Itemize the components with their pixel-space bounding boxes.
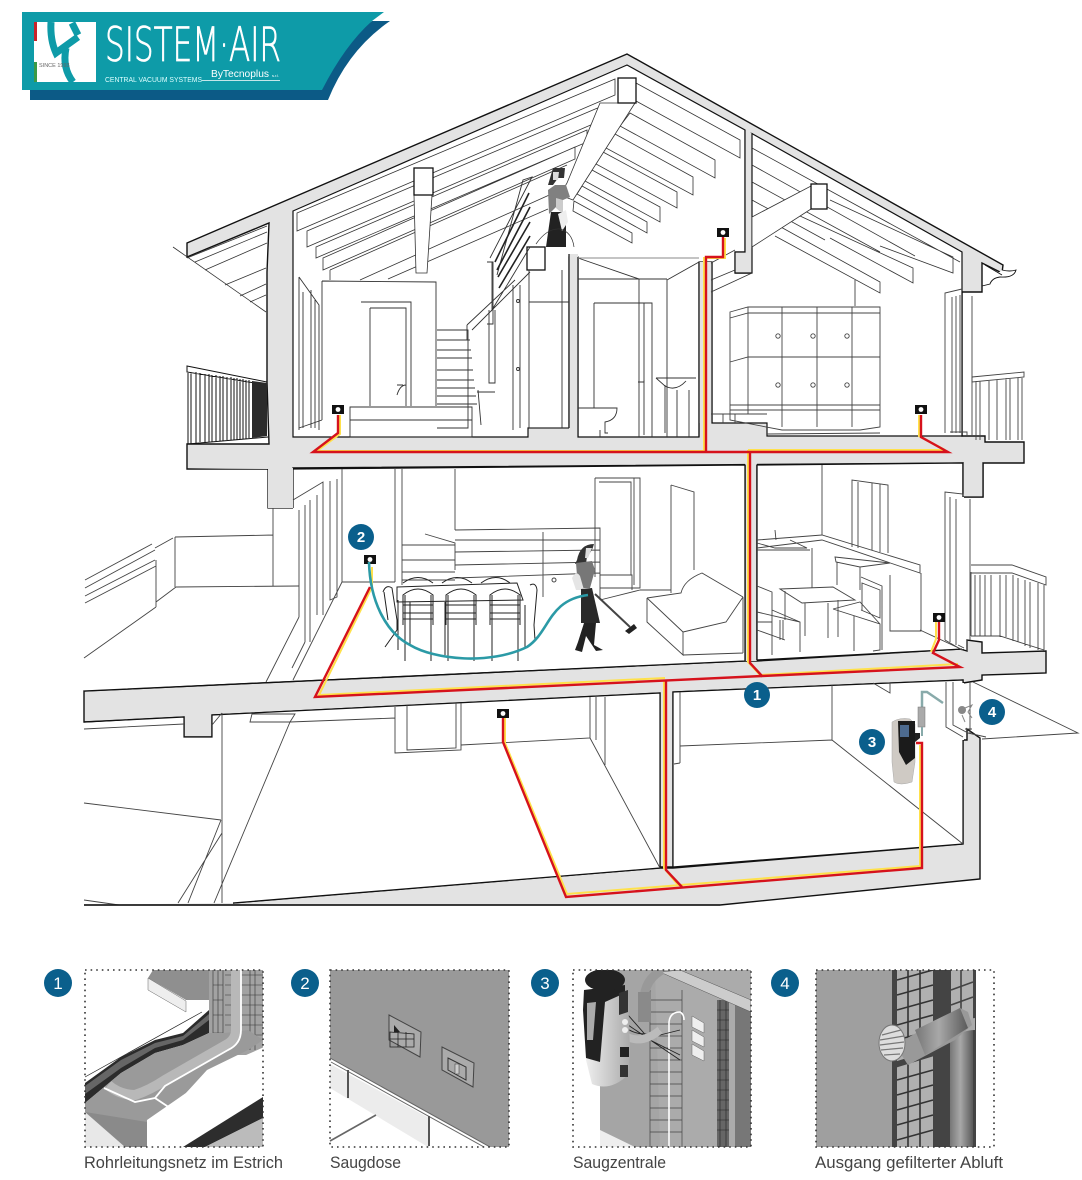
flexible hose: [369, 562, 588, 659]
caption: Rohrleitungsnetz im Estrich: [84, 1154, 283, 1172]
badge: 2: [300, 974, 310, 993]
panel 3: central unit: [531, 969, 751, 1172]
terrace lower left: [84, 508, 299, 658]
badge: 4: [780, 974, 790, 993]
room: basement right: [673, 680, 963, 867]
caption: Ausgang gefilterter Abluft: [815, 1154, 1003, 1172]
badge: [771, 969, 799, 997]
stair railing: [495, 193, 530, 288]
badge 2: 2: [357, 529, 365, 546]
panel 1: pipe network: [44, 969, 283, 1172]
logo: Sistem-Air: [22, 12, 390, 100]
roof beam boxes: [414, 78, 827, 270]
woman vacuuming: [572, 544, 637, 652]
dotted frame: [85, 970, 263, 1147]
vent outlet small: [958, 705, 972, 722]
vacuum exhaust pipe: [918, 692, 943, 736]
attic rafters and beams: [297, 79, 960, 293]
bathroom interior: [578, 258, 699, 437]
logo: Sistem-Air: SISTEM·AIR: [105, 18, 281, 73]
illustration: [583, 969, 751, 1147]
kitchen interior: [757, 465, 963, 655]
badge: [44, 969, 72, 997]
caption: Saugzentrale: [573, 1154, 666, 1172]
basement interior and terrace: [84, 682, 1078, 905]
dining table with chairs: [383, 578, 537, 661]
illustration: [330, 970, 509, 1147]
vacuum sockets: [332, 228, 945, 718]
panel 2: socket: [291, 969, 509, 1172]
dining room interior: [266, 469, 743, 682]
badge 1: [744, 682, 770, 708]
logo: Sistem-Air: SINCE 1993: [39, 63, 70, 69]
logo: Sistem-Air: s.r.l.: [272, 73, 279, 78]
house cross-section: [84, 54, 1078, 905]
badge 3: [859, 729, 885, 755]
number badges on house: [348, 524, 1005, 755]
wardrobe: [711, 280, 880, 434]
badge: [531, 969, 559, 997]
badge: 1: [53, 974, 63, 993]
dotted frame: [816, 970, 994, 1147]
upper right window and balcony railing: [945, 289, 1024, 440]
logo: Sistem-Air: CENTRAL VACUUM SYSTEMS: [105, 77, 202, 84]
panel 4: exhaust: [771, 969, 1003, 1172]
illustration: [85, 970, 264, 1147]
badge 3: 3: [868, 734, 876, 751]
illustration: [816, 970, 976, 1147]
section: grey structure: [84, 54, 1046, 905]
left balcony railing: [187, 366, 268, 444]
man on gallery: [536, 168, 574, 247]
badge 4: 4: [988, 704, 997, 721]
room: basement left: [84, 693, 660, 903]
room: dining level: [84, 465, 745, 691]
logo: Sistem-Air: ByTecnoplus: [211, 69, 269, 80]
pipe network: red side: [313, 237, 960, 897]
room: kitchen: [757, 463, 963, 660]
right window and balcony: [945, 492, 1046, 651]
central vacuum unit: [892, 718, 920, 784]
room: attic left and gallery: [293, 65, 962, 437]
gutter: [982, 265, 1016, 286]
badge 2: [348, 524, 374, 550]
left attic room interior: [299, 177, 569, 437]
dotted frame: [330, 970, 509, 1147]
badge 1: 1: [753, 687, 761, 704]
pipe network: yellow side: [317, 238, 958, 894]
left overhang rafters and gutter: [173, 226, 267, 312]
caption: Saugdose: [330, 1154, 401, 1172]
dotted frame: [573, 970, 751, 1147]
badge: [291, 969, 319, 997]
badge 4: [979, 699, 1005, 725]
badge: 3: [540, 974, 550, 993]
